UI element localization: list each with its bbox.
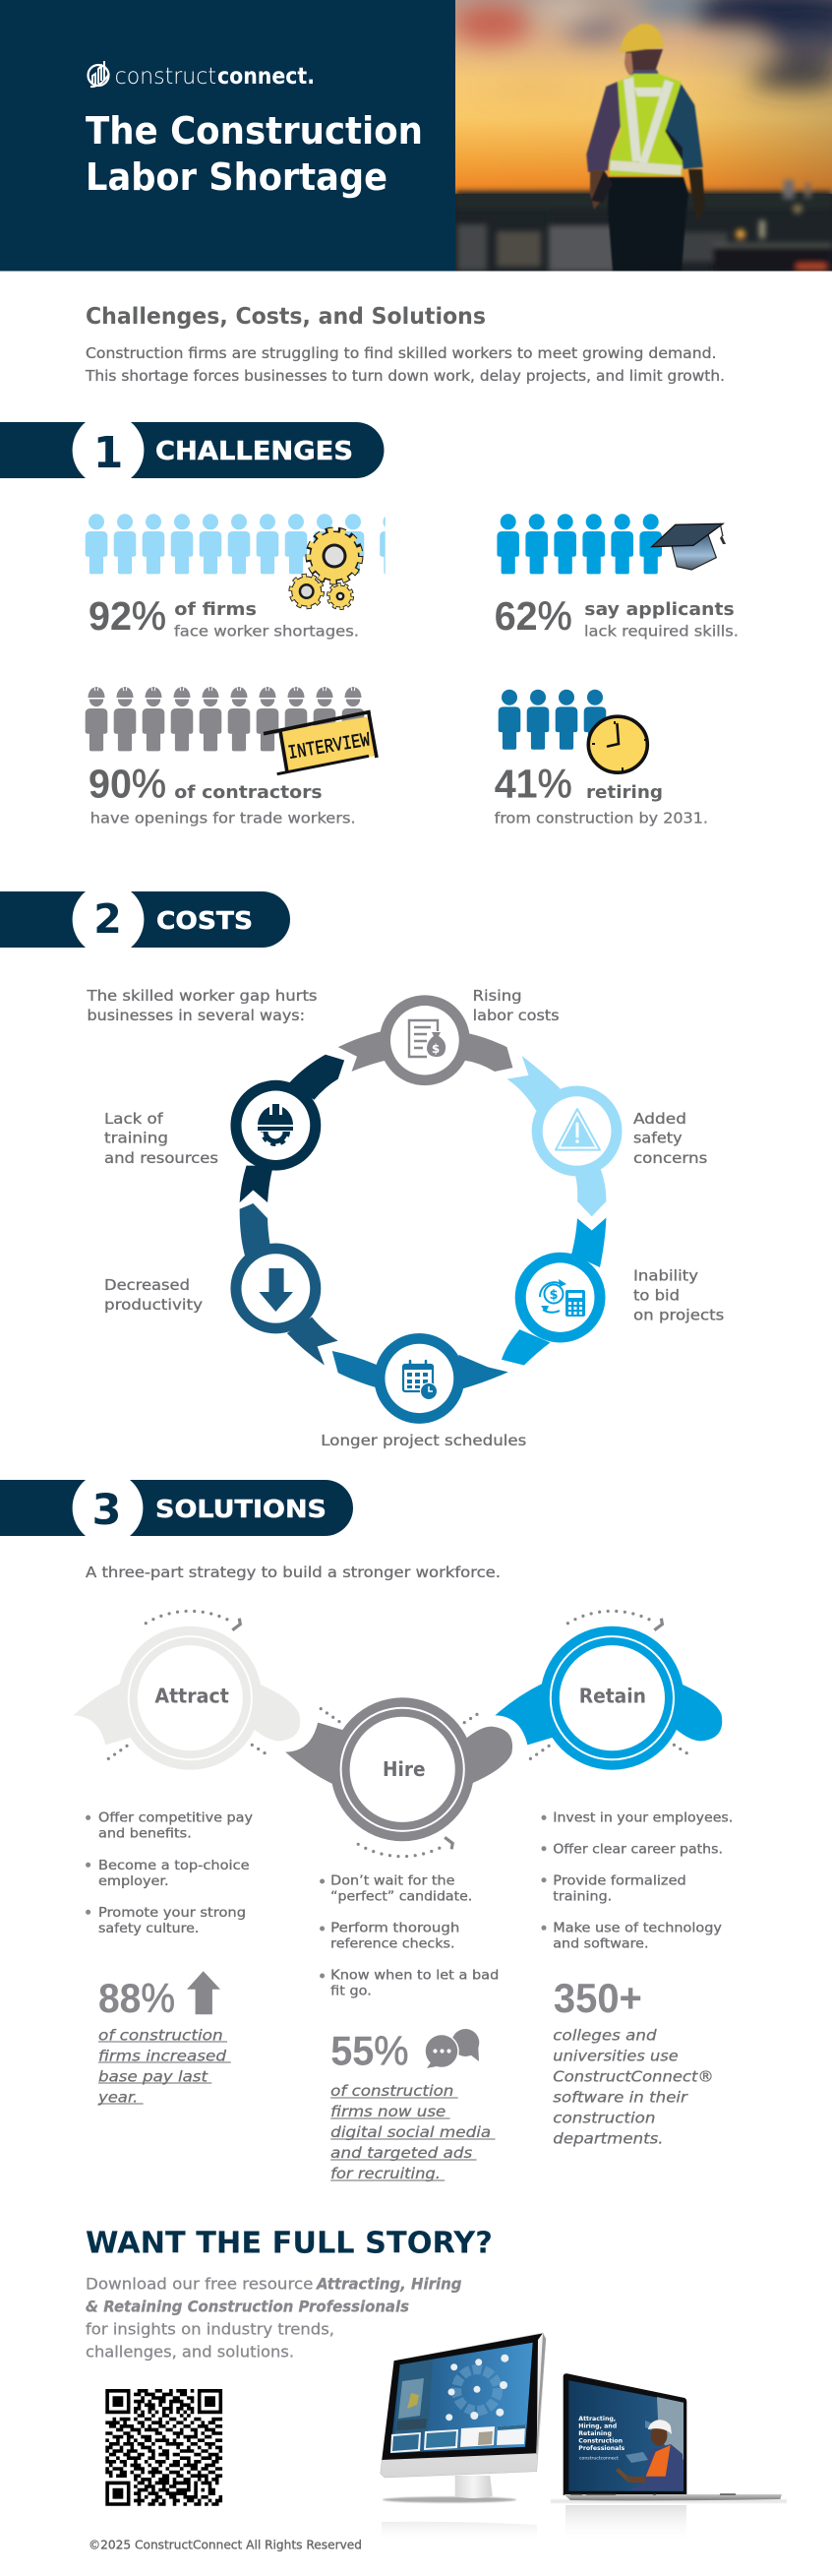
label: added safety concerns: Added [633,1110,686,1128]
node: rising labor costs [338,995,512,1085]
solution badge: hire: Hire [383,1757,425,1781]
icon: interview sign [264,711,377,774]
label: decreased productivity [104,1276,203,1314]
laptop screen: Attracting, [578,2416,616,2423]
figure: 90%: 90% [89,762,166,807]
call to action text: for insights on industry trends, [86,2320,334,2339]
caption: from construction by 2031. [495,810,708,828]
bullet list: hire [320,1874,499,1999]
stat caption: pay: year. [97,2088,138,2106]
intro text: This shortage forces businesses to turn down work, delay projects, and limit growth. [85,367,725,385]
icon: down arrow [259,1268,293,1312]
bullet list: hire: Don’t wait for the [330,1874,454,1889]
caption [90,782,356,828]
bullet list: hire: Perform thorough [330,1922,459,1936]
figure: 41%: 41% [495,762,572,807]
label: added safety concerns [633,1110,707,1167]
call to action text: challenges, and solutions. [86,2343,294,2361]
bullet list: hire: fit go. [330,1985,372,1999]
call to action text: Attracting, Hiring [315,2275,462,2294]
stat: 62% say applicants [495,514,739,641]
logo: constructconnect: construct [115,64,216,90]
QR code [105,2389,222,2506]
monitor screen [390,2343,533,2453]
solution badge: attract [73,1611,300,1770]
stat caption: recruiting: for recruiting. [330,2165,441,2182]
call to action text [86,2275,462,2361]
costs intro text: businesses in several ways: [87,1007,305,1024]
label: rising labor costs: labor costs [473,1007,560,1024]
stat: 90% of contractors [86,687,377,828]
caption: lack required skills. [584,623,739,641]
stat caption: colleges: construction [553,2109,655,2126]
pictogram: blue people [497,514,662,574]
stat caption: recruiting: firms now use [330,2103,446,2120]
header panel [0,0,455,272]
stat: 350+ colleges: 350+ [554,1975,642,2021]
icon: warning triangle [556,1109,600,1150]
label: inability to bid: on projects [633,1307,725,1324]
bullet list: retain: Provide formalized [553,1874,686,1889]
label: rising labor costs [473,987,560,1024]
monitor stand [455,2476,493,2498]
laptop screen: Retaining [578,2430,612,2437]
label: inability to bid: Inability [633,1266,698,1284]
bullet list: retain: Offer clear career paths. [553,1843,723,1858]
stat caption: pay: base pay last [98,2067,208,2085]
label: inability to bid: to bid [633,1286,680,1304]
pictogram: light blue people [86,514,402,574]
label: lack of training: Lack of [104,1110,163,1128]
intro heading: Challenges, Costs, and Solutions [86,304,486,330]
bullet list: attract: and benefits. [98,1827,192,1842]
icon: clock [588,716,647,772]
costs cycle diagram [230,995,622,1424]
caption [495,782,708,828]
label: longer project schedules: Longer project schedules [321,1432,527,1449]
bullet list: retain: and software. [553,1937,649,1952]
stat: 350+ colleges [553,1975,714,2147]
laptop reflection [565,2505,686,2544]
caption: face worker shortages. [174,623,359,641]
stat caption: colleges: software in their [553,2088,688,2106]
intro text [85,344,725,385]
stat caption: colleges: ConstructConnect® [553,2067,714,2085]
section banner: solutions: 3 [92,1486,121,1535]
caption [174,599,359,641]
costs labels [104,987,725,1449]
call to action heading: WANT THE FULL STORY? [86,2226,493,2260]
title [86,109,423,200]
stat caption: colleges: colleges and [553,2026,657,2044]
caption: retiring [586,782,663,803]
node: decreased productivity [230,1203,338,1366]
icon: hard hat and gear [258,1104,293,1144]
stat caption: colleges: departments. [553,2129,664,2147]
title: The Construction [86,109,423,153]
bullet list: retain: Make use of technology [553,1922,722,1936]
copyright: ©2025 ConstructConnect All Rights Reserved [89,2539,362,2552]
stat caption: pay: of construction [98,2026,223,2044]
bullet list: attract: safety culture. [98,1922,199,1936]
solution badge: hire [285,1697,512,1857]
pictogram: teal people [499,690,606,750]
icon: calendar and clock [403,1361,437,1399]
node: longer project schedules [332,1333,508,1424]
bullet list: retain: training. [553,1890,612,1905]
solution badge: retain: Retain [579,1685,646,1708]
bullet list: attract: Offer competitive pay [98,1811,253,1826]
section banner: solutions [0,1480,353,1536]
icon: graduation cap [652,523,726,570]
stat caption: colleges: universities use [553,2047,679,2064]
stat: 88% base pay [97,1971,231,2106]
figure: 62%: 62% [495,593,572,639]
icon: up arrow [187,1971,220,2014]
bullet list: retain [541,1811,733,1952]
node: lack of training [230,1055,344,1202]
caption [584,599,739,641]
stat caption: recruiting: digital social media [330,2123,491,2141]
section banner: solutions: SOLUTIONS [155,1495,327,1523]
section banner: challenges: CHALLENGES [155,437,353,466]
section banner: challenges: 1 [93,428,123,478]
bullet list: hire: reference checks. [330,1937,454,1952]
icon: gears [291,530,360,608]
logo: constructconnect: connect. [217,64,315,90]
header photo: worker at sunset [452,0,832,273]
section banner: challenges [0,422,384,478]
caption: say applicants [584,599,735,620]
stat caption: recruiting: of construction [330,2082,453,2100]
bullet list: attract: employer. [98,1874,169,1889]
pictogram: gray hard-hat people [86,687,364,751]
monitor reflection [382,2522,537,2543]
solution badge: attract: Attract [154,1685,229,1708]
laptop base [564,2494,782,2500]
icon: dollar and calculator: $ [549,1288,559,1303]
desktop monitor mockup [381,2333,546,2543]
caption: of contractors [174,782,323,803]
stat caption: recruiting [330,2082,496,2182]
laptop screen: Hiring, and [578,2423,617,2430]
costs intro text: The skilled worker gap hurts [86,987,318,1005]
intro text: Construction firms are struggling to find skilled workers to meet growing demand. [86,344,716,362]
stat: 88% base pay: 88% [98,1975,175,2021]
icon: dollar and calculator [540,1279,585,1317]
bullet list: hire: Know when to let a bad [330,1969,499,1984]
stat caption: recruiting: and targeted ads [330,2144,473,2162]
laptop screen: Construction [578,2438,623,2444]
stat: 92% of firms [86,514,402,641]
bullet list: attract: Become a top-choice [98,1859,250,1873]
stat: 55% digital social media: 55% [330,2027,409,2073]
label: added safety concerns: concerns [633,1149,707,1167]
bullet list: retain: Invest in your employees. [553,1811,733,1826]
icon: interview sign: INTERVIEW [286,729,372,766]
bullet list: hire: “perfect” candidate. [330,1890,472,1905]
caption: of firms [174,599,257,620]
stat caption: pay [97,2026,231,2106]
call to action text: & Retaining Construction Professionals [86,2298,409,2316]
laptop screen: Professionals [578,2445,624,2452]
laptop screen [568,2380,683,2491]
label: added safety concerns: safety [633,1130,683,1147]
caption: have openings for trade workers. [90,810,356,828]
stat caption: colleges [553,2026,714,2147]
stat caption: pay: firms increased [98,2047,227,2064]
logo: constructconnect [89,61,315,90]
label: inability to bid [633,1266,725,1324]
stat: 55% digital social media [330,2027,496,2182]
label: lack of training: and resources [104,1149,218,1167]
node: added safety concerns [506,1056,622,1216]
stat: 41% retiring [495,690,708,828]
label: lack of training [104,1110,218,1167]
bullet list: attract [86,1811,253,1936]
label: decreased productivity: Decreased [104,1276,190,1294]
label: lack of training: training [104,1130,168,1147]
section banner: costs: 2 [93,895,122,943]
solution badge: retain [495,1611,722,1770]
icon: invoice and money bag [409,1020,446,1057]
icon: invoice and money bag: $ [432,1042,440,1056]
title: Labor Shortage [86,155,387,200]
label: rising labor costs: Rising [473,987,522,1005]
bullet list: attract: Promote your strong [98,1906,246,1921]
section banner: costs [0,891,290,948]
figure: 92%: 92% [89,593,166,639]
icon: speech bubbles [425,2029,479,2068]
laptop mockup [551,2373,787,2544]
label: decreased productivity: productivity [104,1296,203,1314]
costs intro text [86,987,318,1024]
call to action text: Download our free resource [86,2275,313,2294]
section banner: costs: COSTS [156,906,253,935]
node: inability to bid [502,1217,606,1366]
laptop screen: constructconnect [579,2456,619,2462]
solutions intro text: A three-part strategy to build a stronger workforce. [86,1564,501,1581]
